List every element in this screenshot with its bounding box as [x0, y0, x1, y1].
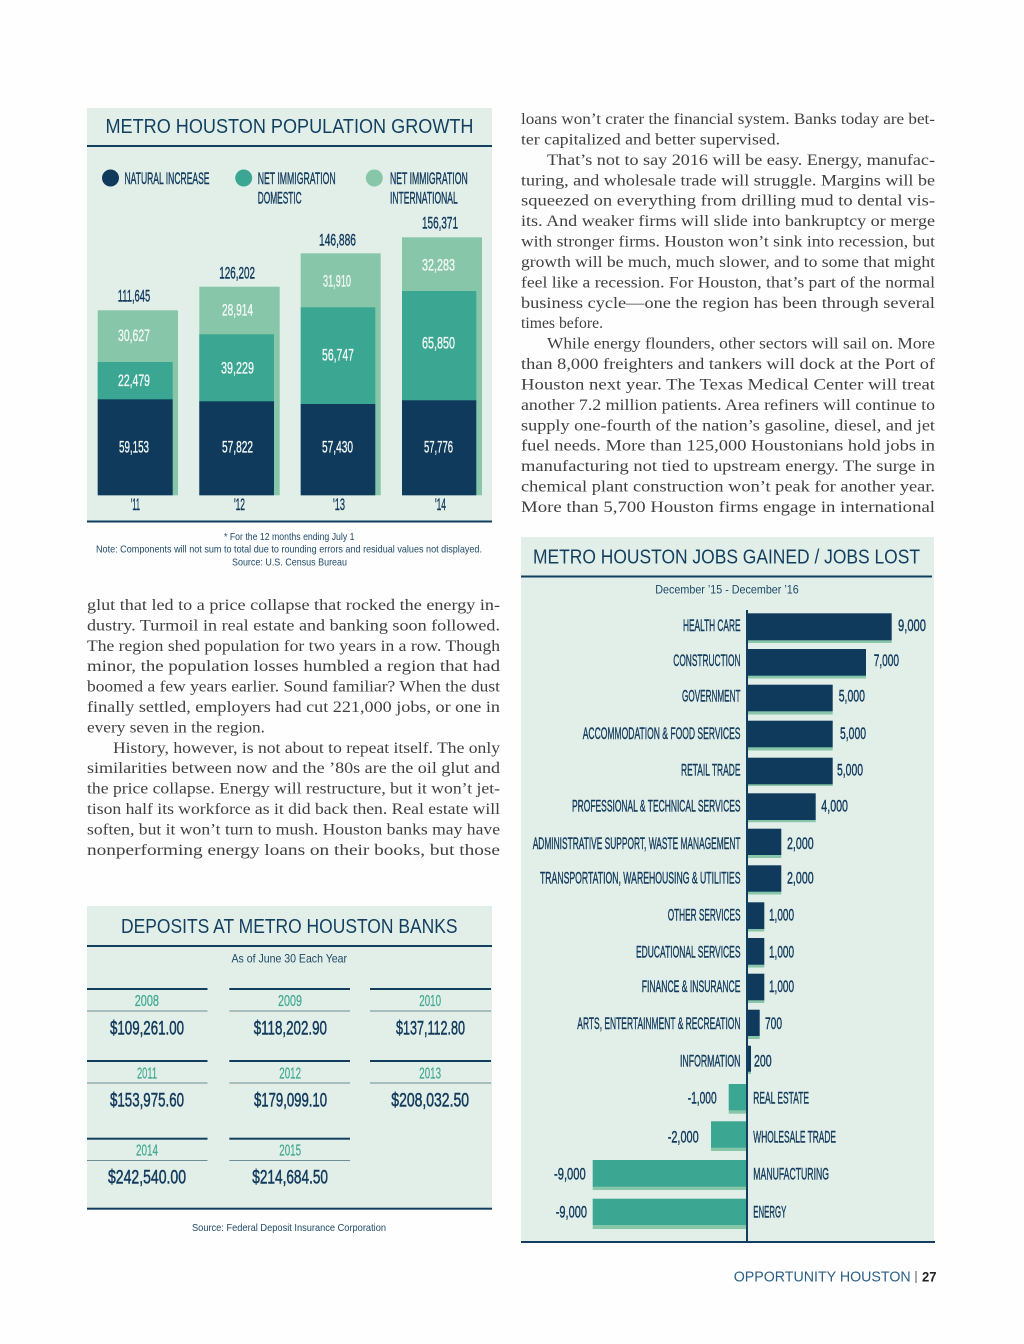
- text block: right column article: While energy flounders, other sectors will sail on. More: [547, 336, 935, 353]
- bar: professional and technical services: PROFESSIONAL & TECHNICAL SERVICES: [572, 798, 740, 816]
- bar: information: [680, 1046, 772, 1074]
- bar: transportation: 2,000: [787, 869, 814, 887]
- text block: left column article: [87, 597, 501, 859]
- bar: government: GOVERNMENT: [682, 688, 740, 706]
- bar: health care: [683, 613, 926, 643]
- bar: manufacturing: [554, 1160, 829, 1190]
- text block: left column article: The region shed population for two years in a row. Though: [87, 638, 500, 655]
- deposit cell: 2015: [229, 1138, 350, 1189]
- text block: left column article: nonperforming energy loans on their books, but those: [87, 842, 500, 859]
- legend: INTERNATIONAL: [390, 190, 458, 208]
- deposit cell: 2011: $153,975.60: [110, 1090, 184, 1112]
- bar: construction: CONSTRUCTION: [673, 652, 740, 670]
- bar: manufacturing: MANUFACTURING: [753, 1165, 829, 1183]
- deposit cell: 2010: $137,112.80: [396, 1017, 465, 1039]
- text block: right column article: fuel needs. More than 125,000 Houstonians hold jobs in: [521, 438, 935, 455]
- stacked bar: 2012: 28,914: [222, 301, 253, 319]
- legend: [102, 170, 468, 208]
- chart notes and source: * For the 12 months ending July 1: [224, 531, 355, 543]
- deposit cell: 2015: $214,684.50: [252, 1167, 328, 1189]
- text block: left column article: glut that led to a price collapse that rocked the energy in-: [87, 597, 500, 614]
- text block: right column article: ter capitalized and better supervised.: [521, 131, 780, 148]
- bar: finance and insurance: 1,000: [769, 978, 794, 996]
- stacked bar: 2014: 156,371: [422, 215, 458, 233]
- text block: left column article: finally settled, employers had cut 221,000 jobs, or one in: [87, 699, 500, 716]
- heading: jobs gained and lost: METRO HOUSTON JOBS GAINED / JOBS LOST: [533, 546, 920, 568]
- bar: health care: HEALTH CARE: [683, 617, 740, 635]
- stacked bar: 2013: [301, 231, 381, 514]
- stacked bar: 2012: 39,229: [221, 359, 254, 377]
- bar: wholesale trade: -2,000: [668, 1128, 699, 1146]
- deposit cell: 2009: [229, 988, 350, 1039]
- text block: right column article: its. And weaker firms will slide into bankruptcy or merge: [521, 213, 935, 230]
- stacked bar: 2013: 56,747: [322, 347, 354, 365]
- bar: transportation: TRANSPORTATION, WAREHOUSING & UTILITIES: [540, 869, 740, 887]
- stacked bar: 2014: '14: [435, 496, 446, 514]
- text block: left column article: tison half its workforce as it did back then. Real estate will: [87, 801, 501, 818]
- deposit cell: 2012: $179,099.10: [254, 1090, 327, 1112]
- stacked bar: 2014: [402, 215, 482, 514]
- bar: professional and technical services: [572, 793, 848, 822]
- text block: right column article: loans won’t crater the financial system. Banks today are bet-: [521, 111, 935, 128]
- panel: metro houston jobs gained and lost: ENERGY: [753, 1204, 786, 1222]
- deposit cell: 2010: 2010: [419, 993, 441, 1010]
- bar: construction: [673, 649, 899, 678]
- stacked bar: 2012: 126,202: [219, 265, 255, 283]
- deposit cell: 2012: [229, 1060, 350, 1112]
- stacked bar: 2014: 32,283: [422, 257, 455, 275]
- stacked bar: 2014: 57,776: [424, 439, 453, 457]
- bar: finance and insurance: [642, 974, 794, 1003]
- legend: NET IMMIGRATION: [258, 170, 336, 188]
- bar: other services: OTHER SERVICES: [668, 906, 740, 924]
- bar: finance and insurance: FINANCE & INSURANCE: [642, 978, 740, 996]
- panel: metro houston population growth: [87, 108, 492, 522]
- bar: transportation: [540, 865, 814, 894]
- chart notes and source: Source: U.S. Census Bureau: [232, 557, 347, 569]
- bar: real estate: -1,000: [688, 1090, 717, 1108]
- bar: accommodation and food services: 5,000: [840, 725, 866, 743]
- deposit cell: 2008: [87, 988, 208, 1039]
- bar: other services: [668, 902, 794, 932]
- deposit cell: 2011: [87, 1060, 208, 1112]
- bar: professional and technical services: 4,000: [821, 798, 848, 816]
- bar: other services: 1,000: [769, 906, 794, 924]
- text block: right column article: than 8,000 freighters and tankers will dock at the Port of: [521, 356, 936, 373]
- bar: government: 5,000: [839, 688, 865, 706]
- text block: right column article: growth will be much, much slower, and to some that might: [521, 254, 936, 271]
- deposit cell: 2015: 2015: [279, 1143, 301, 1160]
- bar: real estate: [688, 1084, 809, 1114]
- deposit cell: 2014: [87, 1138, 208, 1189]
- text block: right column article: turing, and wholesale trade will struggle. Margins will be: [521, 172, 935, 189]
- text block: left column article: boomed a few years earlier. Sound familiar? When the dust: [87, 679, 501, 696]
- bar: wholesale trade: WHOLESALE TRADE: [753, 1128, 836, 1146]
- stacked bar: 2011: 22,479: [118, 372, 150, 390]
- footer: publication name and page number: 27: [922, 1269, 937, 1285]
- text block: left column article: the price collapse. Energy will restructure, but it won’t jet-: [87, 781, 500, 798]
- bar: retail trade: 5,000: [837, 762, 863, 780]
- bar: educational services: [636, 938, 794, 968]
- bar: construction: 7,000: [874, 652, 899, 670]
- deposit cell: 2013: 2013: [419, 1065, 441, 1082]
- bar: retail trade: [681, 758, 863, 786]
- deposit cell: 2014: $242,540.00: [108, 1167, 186, 1189]
- deposit cell: 2008: $109,261.00: [110, 1017, 184, 1039]
- subheading: date: As of June 30 Each Year: [232, 952, 347, 966]
- bar: educational services: 1,000: [769, 943, 794, 961]
- text block: right column article: That’s not to say 2016 will be easy. Energy, manufac-: [547, 152, 935, 169]
- stacked bar: 2011: 30,627: [118, 327, 150, 345]
- bar: real estate: REAL ESTATE: [753, 1090, 809, 1108]
- deposit cell: 2009: $118,202.90: [254, 1017, 327, 1039]
- text block: right column article: with stronger firms. Houston won’t sink into recession, but: [521, 234, 936, 250]
- bar: health care: 9,000: [898, 617, 926, 635]
- text block: right column article: supply one-fourth of the nation’s gasoline, diesel, and jet: [521, 417, 936, 434]
- deposit cell: 2011: 2011: [137, 1065, 157, 1082]
- stacked bar: 2012: '12: [234, 496, 245, 514]
- bar: information: 200: [754, 1052, 772, 1070]
- stacked bar: 2011: 111,645: [118, 288, 150, 306]
- text block: left column article: History, however, is not about to repeat itself. The only: [113, 740, 500, 757]
- bar: arts and recreation: [577, 1010, 782, 1039]
- heading: deposits: DEPOSITS AT METRO HOUSTON BANKS: [121, 916, 458, 938]
- bar: administrative support: [533, 829, 814, 858]
- bar: energy: [556, 1199, 786, 1229]
- panel: deposits at metro houston banks: [87, 906, 492, 1210]
- chart notes and source: Note: Components will not sum to total due to rounding errors and residual values not displayed.: [96, 544, 482, 556]
- deposit cell: 2012: 2012: [279, 1065, 301, 1082]
- bar: accommodation and food services: ACCOMMODATION & FOOD SERVICES: [583, 725, 740, 743]
- deposit cell: 2010: [370, 988, 491, 1039]
- subheading: date range: December ’15 - December ’16: [655, 582, 799, 596]
- panel: metro houston jobs gained and lost: [521, 537, 935, 1243]
- bar: government: [682, 685, 865, 714]
- text block: right column article: manufacturing not tied to upstream energy. The surge in: [521, 458, 935, 475]
- stacked bar: 2013: 57,430: [322, 439, 353, 457]
- text block: left column article: similarities between now and the ’80s are the oil glut and: [87, 760, 500, 777]
- text block: right column article: Houston next year. The Texas Medical Center will treat: [521, 376, 936, 394]
- bar: accommodation and food services: [583, 721, 866, 750]
- deposit cell: 2009: 2009: [278, 993, 302, 1010]
- stacked bar: 2013: 146,886: [319, 231, 356, 249]
- footer: publication name and page number: OPPORTUNITY HOUSTON: [734, 1269, 911, 1286]
- text block: right column article: another 7.2 million patients. Area refiners will continue to: [521, 397, 935, 414]
- text block: left column article: minor, the population losses humbled a region that had: [87, 658, 500, 675]
- text block: right column article: times before.: [521, 315, 603, 332]
- deposit cell: 2013: [370, 1060, 491, 1112]
- stacked bar: 2011: '11: [131, 496, 140, 514]
- text block: left column article: dustry. Turmoil in real estate and banking soon followed.: [87, 617, 500, 634]
- source: deposits: Source: Federal Deposit Insurance Corporation: [192, 1222, 386, 1234]
- text block: left column article: every seven in the region.: [87, 719, 265, 736]
- heading: population growth: METRO HOUSTON POPULATION GROWTH: [106, 116, 474, 138]
- text block: right column article: chemical plant construction won’t peak for another year.: [521, 479, 935, 496]
- stacked bar: 2011: 59,153: [119, 439, 149, 457]
- stacked bar: 2012: [199, 265, 280, 514]
- stacked bar: 2012: 57,822: [222, 439, 253, 457]
- deposit cell: 2008: 2008: [135, 993, 159, 1010]
- bar: arts and recreation: ARTS, ENTERTAINMENT & RECREATION: [577, 1015, 740, 1033]
- chart notes and source: [96, 531, 482, 569]
- legend: NET IMMIGRATION: [390, 170, 468, 188]
- deposit cell: 2013: $208,032.50: [391, 1090, 469, 1112]
- text block: right column article: squeezed on everything from drilling mud to dental vis-: [521, 193, 935, 210]
- legend: NATURAL INCREASE: [124, 170, 210, 188]
- bar: wholesale trade: [668, 1121, 836, 1151]
- stacked bar: 2011: [98, 288, 178, 514]
- legend: DOMESTIC: [258, 190, 302, 208]
- bar: arts and recreation: 700: [765, 1015, 782, 1033]
- text block: left column article: soften, but it won’t turn to mush. Houston banks may have: [87, 821, 500, 838]
- text block: right column article: business cycle—one the region has been through several: [521, 295, 936, 312]
- text block: right column article: More than 5,700 Houston firms engage in international: [521, 499, 936, 516]
- text block: right column article: feel like a recession. For Houston, that’s part of the normal: [521, 274, 936, 291]
- bar: information: INFORMATION: [680, 1052, 740, 1070]
- bar: manufacturing: -9,000: [554, 1165, 586, 1183]
- bar: energy: -9,000: [556, 1204, 587, 1222]
- deposit cell: 2014: 2014: [136, 1143, 158, 1160]
- text block: right column article: [521, 111, 936, 516]
- stacked bar: 2013: 31,910: [323, 273, 351, 291]
- bar: educational services: EDUCATIONAL SERVICES: [636, 943, 740, 961]
- stacked bar: 2014: 65,850: [422, 334, 455, 352]
- bar: retail trade: RETAIL TRADE: [681, 762, 740, 780]
- bar: administrative support: ADMINISTRATIVE SUPPORT, WASTE MANAGEMENT: [533, 835, 740, 853]
- bar: administrative support: 2,000: [787, 835, 814, 853]
- stacked bar: 2013: '13: [333, 496, 345, 514]
